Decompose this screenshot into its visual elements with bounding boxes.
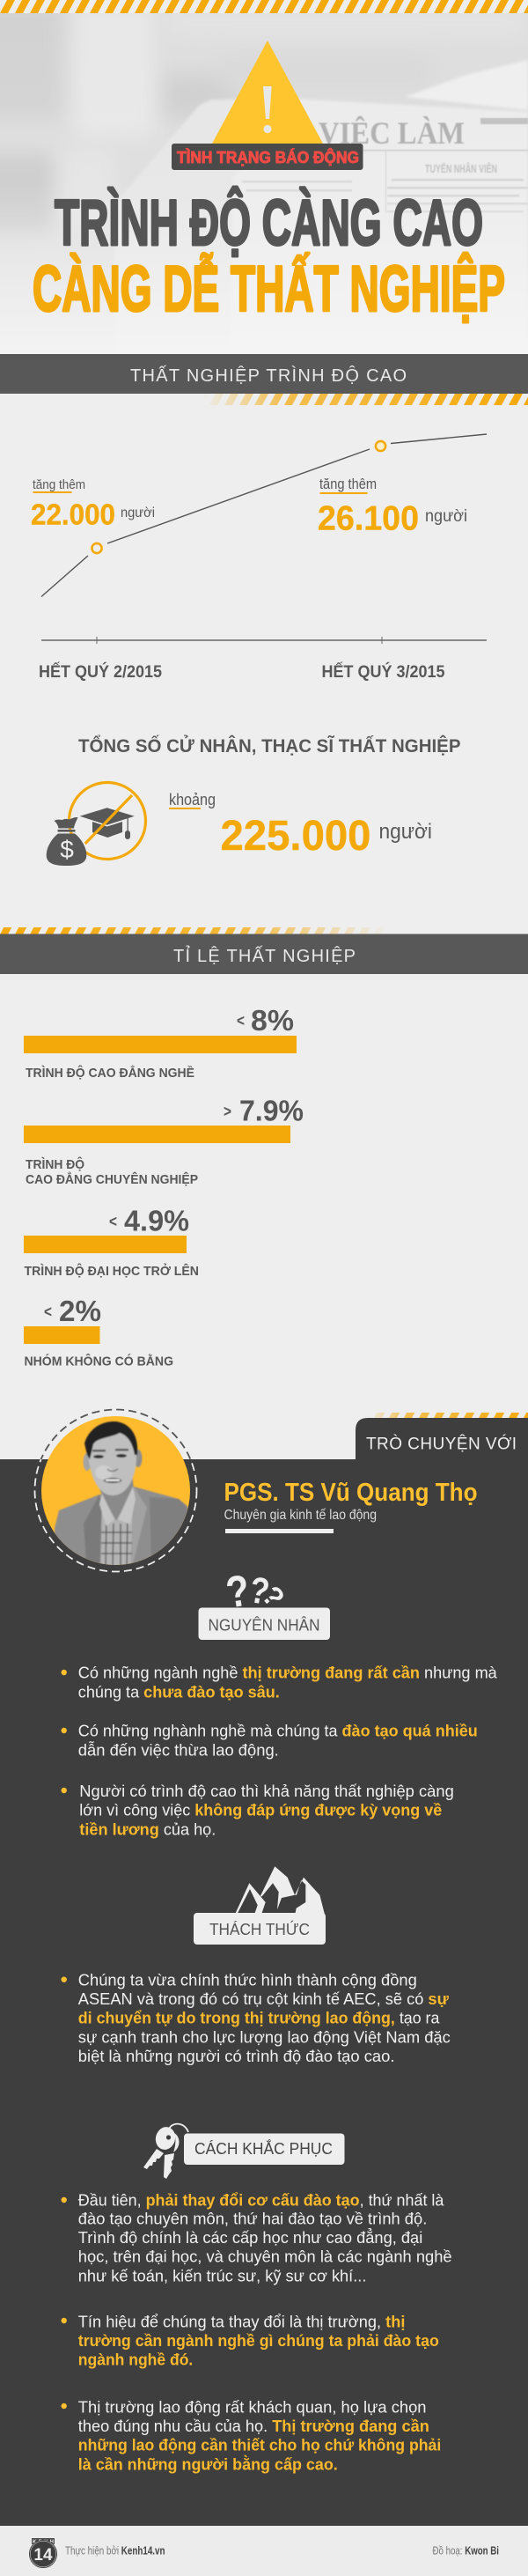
alert badge: TÌNH TRẠNG BÁO ĐỘNG bbox=[177, 148, 359, 166]
mouth bbox=[104, 1478, 121, 1483]
icon: warning triangle bbox=[212, 41, 323, 144]
callout: Q3 increase: tăng thêm bbox=[319, 476, 377, 492]
icon: question marks: ? bbox=[223, 1565, 253, 1617]
nose bbox=[107, 1469, 118, 1471]
icon: question marks bbox=[223, 1565, 291, 1617]
tab label: TRÒ CHUYỆN VỚI bbox=[366, 1434, 517, 1453]
text block: challenges bbox=[62, 1971, 451, 2065]
bar: university and above: TRÌNH ĐỘ ĐẠI HỌC TRỞ LÊN bbox=[25, 1263, 199, 1279]
bar: university and above: < bbox=[109, 1213, 117, 1230]
heading: causes: NGUYÊN NHÂN bbox=[208, 1617, 320, 1635]
line chart bbox=[39, 434, 487, 682]
text block: solutions bbox=[62, 2191, 452, 2473]
bar: no degree bbox=[24, 1295, 173, 1369]
cause 3: lớn vì công việc không đáp ứng được kỳ vọng về bbox=[79, 1802, 442, 1819]
text block: challenges: sự cạnh tranh cho lực lượng lao động Việt Nam đặc bbox=[78, 2028, 451, 2046]
expert name: PGS. TS Vũ Quang Thọ bbox=[224, 1479, 477, 1507]
newspaper sheet bbox=[135, 99, 528, 252]
solution 3: là cần những người bằng cấp cao. bbox=[78, 2454, 338, 2473]
callout: Q3 increase: người bbox=[425, 507, 467, 526]
bar: no degree: NHÓM KHÔNG CÓ BẰNG bbox=[25, 1353, 173, 1369]
heading: solutions: CÁCH KHẮC PHỤC bbox=[194, 2139, 333, 2158]
axis label Q3: HẾT QUÝ 3/2015 bbox=[322, 662, 445, 682]
data point: Q2 bbox=[92, 543, 102, 553]
icon: mountains bbox=[235, 1866, 325, 1915]
bar: no degree: < bbox=[44, 1303, 52, 1321]
expert name: Chuyên gia kinh tế lao động bbox=[224, 1508, 377, 1523]
callout: Q2 increase: tăng thêm bbox=[33, 477, 85, 492]
alert badge bbox=[172, 144, 363, 170]
newspaper masthead: TUYỂN NHÂN VIÊN bbox=[425, 162, 497, 175]
section band: unemployment rate bbox=[0, 934, 528, 974]
callout: Q2 increase bbox=[31, 477, 155, 530]
neck bbox=[99, 1478, 134, 1521]
bar: vocational college: TRÌNH ĐỘ CAO ĐẲNG NGHỀ bbox=[26, 1065, 194, 1081]
section band: unemployment rate: TỈ LỆ THẤT NGHIỆP bbox=[173, 946, 356, 966]
bar: professional college: TRÌNH ĐỘ bbox=[26, 1156, 84, 1172]
cause 3: tiền lương của họ. bbox=[79, 1820, 216, 1838]
heading: challenges bbox=[194, 1913, 326, 1945]
cause 2 bbox=[62, 1723, 478, 1759]
callout: Q2 increase: người bbox=[121, 506, 155, 520]
jacket bbox=[54, 1486, 188, 1562]
bar: professional college bbox=[24, 1094, 304, 1187]
hair bbox=[84, 1421, 137, 1459]
callout: Q3 increase: 26.100 bbox=[318, 500, 419, 537]
solution 2 bbox=[62, 2313, 439, 2369]
icon: no money for degree: $ bbox=[60, 836, 74, 863]
text block: causes bbox=[62, 1664, 498, 1838]
cause 2: dẫn đến việc thừa lao động. bbox=[78, 1740, 279, 1759]
solution 1: học, trên đại học, và chuyên môn là các ngành nghề bbox=[78, 2248, 452, 2266]
bar: no degree: 2% bbox=[59, 1295, 101, 1327]
solution 3: theo đúng nhu cầu của họ. Thị trường đang cần bbox=[78, 2417, 429, 2435]
eyebrows bbox=[92, 1450, 106, 1451]
cause 1: Có những ngành nghề thị trường đang rất cần nhưng mà bbox=[78, 1664, 498, 1682]
face bbox=[88, 1432, 136, 1495]
stat: total: khoảng bbox=[169, 791, 216, 808]
heading: solutions bbox=[184, 2133, 345, 2165]
solution 1: Đầu tiên, phải thay đổi cơ cấu đào tạo, thứ nhất là bbox=[78, 2191, 444, 2209]
logo: Kenh14: KENH bbox=[33, 2540, 54, 2545]
credit: designer: Đồ hoạ: Kwon Bi bbox=[433, 2543, 499, 2558]
section band: high-level unemployment bbox=[0, 354, 528, 394]
heading: challenges: THÁCH THỨC bbox=[209, 1920, 310, 1938]
expert name bbox=[224, 1479, 477, 1533]
cause 3: Người có trình độ cao thì khả năng thất nghiệp càng bbox=[79, 1783, 454, 1800]
bar: professional college: > bbox=[224, 1103, 231, 1120]
newspaper masthead bbox=[242, 115, 528, 213]
bar chart bbox=[24, 1004, 304, 1369]
hero photo background: newspaper bbox=[0, 13, 528, 247]
solution 3: Thị trường lao động rất khách quan, họ lựa chọn bbox=[78, 2398, 427, 2416]
bar: vocational college: 8% bbox=[251, 1004, 294, 1037]
solution 1: Trình độ chính là các cấp học như cao đẳng, đại bbox=[78, 2228, 422, 2247]
logo: Kenh14 bbox=[30, 2538, 56, 2568]
solution 2: trường cần ngành nghề gì chúng ta phải đào tạo bbox=[78, 2332, 439, 2350]
cause 1 bbox=[62, 1664, 498, 1701]
portrait bbox=[35, 1409, 197, 1576]
bar: university and above bbox=[24, 1205, 199, 1279]
text block: challenges: di chuyển tự do trong thị trường lao động, tạo ra bbox=[78, 2010, 440, 2027]
heading: causes bbox=[199, 1608, 330, 1640]
solution 3: những lao động cần thiết cho họ chứ không phải bbox=[78, 2437, 441, 2454]
solution 1: đào tạo chuyên môn, thứ hai đào tạo về trình độ. bbox=[78, 2211, 427, 2228]
text block: challenges: biệt là những người có trình độ đào tạo cao. bbox=[78, 2048, 395, 2065]
time axis bbox=[41, 637, 487, 644]
bar: vocational college bbox=[24, 1004, 297, 1081]
stat: total: người bbox=[378, 820, 432, 844]
cause 3 bbox=[62, 1783, 454, 1838]
axis label Q2: HẾT QUÝ 2/2015 bbox=[39, 662, 162, 682]
eyes bbox=[93, 1455, 104, 1458]
collar bbox=[99, 1494, 114, 1526]
icon: keys bbox=[143, 2124, 188, 2179]
icon: question marks: ? bbox=[246, 1569, 272, 1613]
solution 3 bbox=[62, 2398, 441, 2473]
shirt bbox=[100, 1512, 133, 1565]
icon: no money for degree bbox=[47, 782, 146, 866]
top hazard stripes bbox=[0, 0, 528, 13]
credit: publisher: Thực hiện bởi Kenh14.vn bbox=[65, 2543, 165, 2558]
heading: total unemployed graduates: TỔNG SỐ CỬ NHÂN, THẠC SĨ THẤT NGHIỆP bbox=[78, 734, 461, 757]
ears bbox=[83, 1453, 92, 1471]
solution 1: như kế toán, kiến trúc sư, kỹ sư cơ khí... bbox=[78, 2267, 366, 2284]
data point: Q3 bbox=[376, 441, 385, 451]
footer bbox=[0, 2526, 528, 2576]
section band: high-level unemployment: THẤT NGHIỆP TRÌNH ĐỘ CAO bbox=[130, 365, 407, 386]
solution 2: ngành nghề đó. bbox=[78, 2351, 193, 2369]
sleeve bbox=[405, 60, 528, 110]
stripes below band bbox=[206, 394, 528, 405]
bar: vocational college: < bbox=[237, 1012, 245, 1030]
newspaper masthead: VIỆC LÀM bbox=[319, 115, 465, 151]
bar: university and above: 4.9% bbox=[124, 1205, 189, 1236]
text block: challenges: Chúng ta vừa chính thức hình thành cộng đồng bbox=[78, 1971, 417, 1989]
cause 1: chúng ta chưa đào tạo sâu. bbox=[78, 1683, 280, 1701]
bar: professional college: CAO ĐẲNG CHUYÊN NGHIỆP bbox=[26, 1171, 198, 1187]
title bbox=[33, 188, 505, 325]
logo: Kenh14: 14 bbox=[33, 2546, 53, 2565]
stripes above band 2 bbox=[0, 927, 380, 934]
stat: total bbox=[169, 791, 432, 860]
icon: question marks: ? bbox=[256, 1580, 291, 1613]
text block: challenges: ASEAN và trong đó có trụ cột kinh tế AEC, sẽ có sự bbox=[78, 1990, 450, 2008]
solution 1 bbox=[62, 2191, 452, 2284]
stripes above interview tab bbox=[369, 1413, 528, 1418]
callout: Q3 increase bbox=[318, 476, 467, 537]
solution 2: Tín hiệu để chúng ta thay đổi là thị trường, thị bbox=[78, 2313, 405, 2330]
bar: professional college: 7.9% bbox=[239, 1094, 304, 1127]
stat: total: 225.000 bbox=[220, 813, 371, 860]
cause 2: Có những nghành nghề mà chúng ta đào tạo quá nhiều bbox=[78, 1723, 478, 1740]
callout: Q2 increase: 22.000 bbox=[31, 498, 115, 530]
